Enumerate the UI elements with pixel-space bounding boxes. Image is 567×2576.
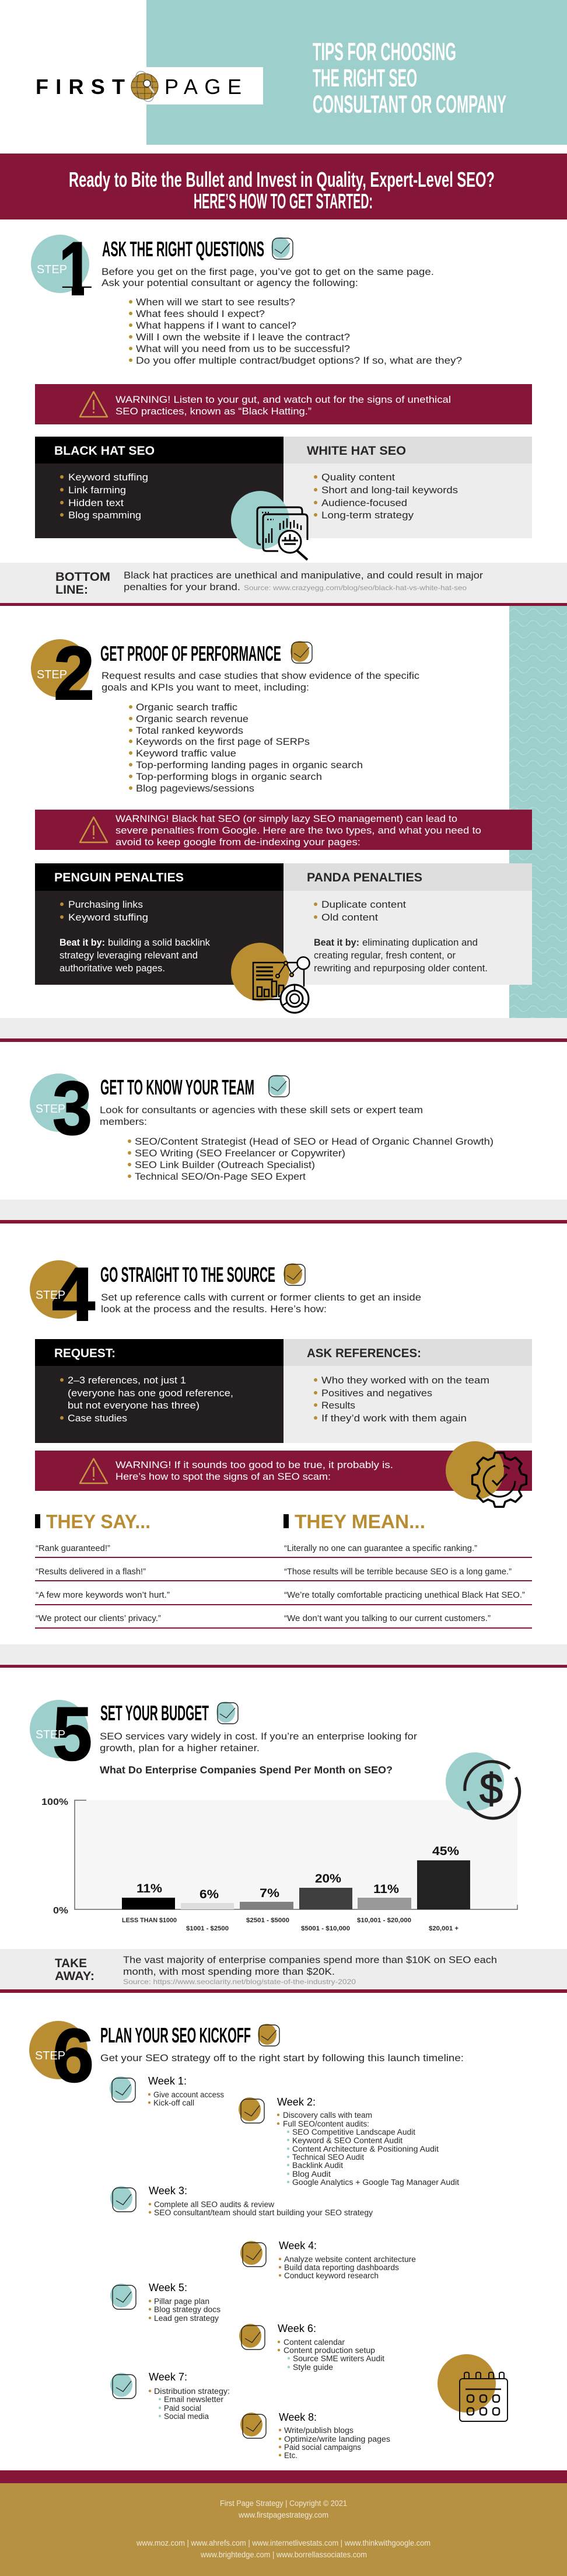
timeline: week 1: Week 1: — [148, 2075, 187, 2087]
panel: bottom line: Source: www.crazyegg.com/blog/seo/black-hat-vs-white-hat-seo — [244, 584, 467, 592]
icon: dollar ring — [446, 1752, 520, 1818]
timeline: week 7: Week 7: — [149, 2371, 187, 2383]
panel: request: (everyone has one good reference, — [68, 1388, 233, 1399]
logo — [36, 67, 263, 104]
team skill list: SEO/Content Strategist (Head of SEO or Head of Organic Channel Growth) — [135, 1136, 494, 1147]
bar chart: $1001 - $2500 — [186, 1925, 229, 1932]
warning callout 1 — [35, 384, 532, 424]
question list — [129, 297, 462, 366]
timeline: week 3: Complete all SEO audits & review — [154, 2200, 274, 2209]
divider band — [0, 1644, 567, 1668]
panel: penguin penalties: PENGUIN PENALTIES — [54, 871, 184, 884]
question list: Will I own the website if I leave the contract? — [136, 332, 350, 343]
timeline: week 2: Technical SEO Audit — [292, 2153, 364, 2162]
translations: “Those results will be terrible because SEO is a long game.” — [284, 1567, 512, 1577]
bar chart: $10,001 - $20,000 — [357, 1917, 411, 1924]
timeline: week 7: Distribution strategy: — [154, 2387, 230, 2396]
icon: checkbox — [268, 1075, 289, 1097]
timeline: week 2: Backlink Audit — [292, 2161, 343, 2170]
panel: white hat seo: Quality content — [321, 472, 395, 483]
timeline: week 3 — [110, 2185, 373, 2217]
warning callout 3: WARNING! If it sounds too good to be true, it probably is. — [116, 1459, 393, 1470]
bar chart: 100% — [41, 1797, 68, 1807]
icon: checkbox — [290, 641, 312, 663]
panel: panda penalties: Beat it by: — [314, 937, 359, 948]
panel: request: but not everyone has three) — [68, 1400, 200, 1411]
panel: white hat seo: Short and long-tail keywords — [321, 484, 458, 496]
warning callout 1: SEO practices, known as “Black Hatting.” — [116, 406, 312, 417]
question list: What will you need from us to be successful? — [136, 343, 350, 354]
icon: analytics windows with magnifier — [231, 491, 307, 560]
panel: black hat seo: Link farming — [68, 484, 126, 496]
timeline: week 8: Paid social campaigns — [284, 2443, 361, 2452]
quotes: “Rank guaranteed!” — [36, 1544, 110, 1553]
bar chart: $2501 - $5000 — [246, 1917, 289, 1924]
timeline: week 2: Blog Audit — [292, 2170, 331, 2178]
step 2 badge: STEP — [37, 668, 67, 681]
step 1 badge: 1 — [59, 226, 93, 311]
step 3 badge — [30, 1065, 92, 1151]
panel: panda penalties: rewriting and repurposing older content. — [314, 963, 488, 974]
timeline: week 6 — [239, 2323, 384, 2372]
translations: “Literally no one can guarantee a specific ranking.” — [284, 1544, 477, 1553]
panel: penguin penalties: building a solid backlink — [108, 937, 210, 948]
translations: “We don’t want you talking to our current customers.” — [284, 1614, 491, 1623]
team skill list: SEO Link Builder (Outreach Specialist) — [135, 1159, 315, 1170]
panel: take away: Source: https://www.seoclarity.net/blog/state-of-the-industry-2020 — [123, 1978, 356, 1986]
kpi list: Organic search traffic — [136, 702, 238, 713]
panel: take away: TAKE — [55, 1957, 87, 1970]
banner: how to get started — [0, 154, 567, 219]
timeline: week 3: Week 3: — [149, 2185, 187, 2197]
timeline: week 2: Full SEO/content audits: — [283, 2120, 369, 2128]
team skill list — [128, 1136, 494, 1182]
panel: black hat seo: Hidden text — [68, 497, 124, 508]
chart title: What Do Enterprise Companies Spend Per Month on SEO? — [100, 1764, 393, 1776]
title — [313, 38, 506, 118]
timeline: week 7 — [110, 2371, 230, 2421]
panel: panda penalties: eliminating duplication and — [362, 937, 478, 948]
timeline: week 4: Conduct keyword research — [284, 2271, 379, 2280]
panel: penguin penalties: Beat it by: — [60, 937, 105, 948]
step 1 badge: STEP — [37, 263, 67, 276]
panel: panda penalties: PANDA PENALTIES — [307, 871, 422, 884]
panel: white hat seo — [284, 437, 532, 538]
panel: penguin penalties — [35, 863, 284, 985]
bar chart: 7% — [260, 1887, 279, 1900]
logo: PAGE — [164, 75, 242, 99]
divider band — [0, 1200, 567, 1223]
step 4 section — [0, 1252, 567, 1668]
bar chart: 45% — [432, 1845, 459, 1858]
panel: panda penalties: Duplicate content — [321, 899, 406, 910]
warning callout 1: WARNING! Listen to your gut, and watch out for the signs of unethical — [116, 394, 451, 405]
timeline: week 2: Discovery calls with team — [283, 2111, 372, 2120]
panel: request: REQUEST: — [54, 1347, 116, 1360]
timeline: week 1: Kick-off call — [153, 2099, 194, 2107]
timeline: week 2: Keyword & SEO Content Audit — [292, 2136, 402, 2145]
bar chart: 0% — [53, 1906, 68, 1916]
icon: checkbox — [216, 1702, 238, 1724]
timeline: week 8: Week 8: — [279, 2411, 317, 2423]
they mean heading: THEY MEAN... — [295, 1511, 425, 1532]
panel: penguin penalties: Purchasing links — [68, 899, 143, 910]
icon: dollar ring: $ — [480, 1766, 503, 1812]
icon: checkbox — [271, 237, 293, 259]
step 3 badge: STEP — [36, 1103, 65, 1116]
icon: calendar — [438, 2354, 508, 2421]
step 2 badge: 2 — [54, 630, 94, 716]
question list: Do you offer multiple contract/budget options? If so, what are they? — [136, 355, 462, 366]
step 2 badge — [31, 630, 94, 716]
step 4 badge: 4 — [52, 1252, 95, 1337]
footer: www.brightedge.com | www.borrellassociates.com — [200, 2550, 367, 2559]
kpi list: Blog pageviews/sessions — [136, 783, 254, 794]
panel: white hat seo: WHITE HAT SEO — [307, 444, 406, 458]
step 2 intro: Request results and case studies that show evidence of the specific — [102, 670, 420, 681]
timeline: week 2: SEO Competitive Landscape Audit — [292, 2128, 415, 2136]
step 1 heading: ASK THE RIGHT QUESTIONS — [102, 237, 264, 261]
step 4 intro — [101, 1292, 421, 1315]
team skill list: Technical SEO/On-Page SEO Expert — [135, 1171, 306, 1182]
panel: take away: month, with most spending more than $20K. — [123, 1966, 335, 1977]
step 5 badge — [30, 1691, 92, 1776]
timeline: week 4: Build data reporting dashboards — [284, 2263, 399, 2272]
decorative teal wave strip — [509, 606, 567, 1018]
warning callout 3 — [35, 1451, 532, 1491]
panel: black hat seo: Keyword stuffing — [68, 472, 148, 483]
title background — [146, 0, 567, 145]
question list: What happens if I want to cancel? — [136, 320, 296, 331]
panel: penguin penalties: Keyword stuffing — [68, 912, 148, 923]
bar chart: 20% — [315, 1872, 341, 1885]
step 2 section — [0, 606, 567, 1042]
footer — [0, 2470, 567, 2576]
they say column — [35, 1511, 170, 1623]
panel: ask references: Positives and negatives — [321, 1388, 432, 1399]
timeline: week 4: Analyze website content architecture — [284, 2255, 416, 2264]
timeline: week 7: Social media — [164, 2412, 209, 2421]
warning callout 3: Here’s how to spot the signs of an SEO scam: — [116, 1471, 331, 1482]
timeline: week 8: Optimize/write landing pages — [284, 2435, 390, 2443]
timeline: week 2: Google Analytics + Google Tag Manager Audit — [292, 2178, 459, 2187]
step 3 heading: GET TO KNOW YOUR TEAM — [100, 1075, 254, 1099]
step 5 badge: STEP — [36, 1728, 65, 1741]
footer: www.firstpagestrategy.com — [238, 2511, 328, 2519]
step 5 intro — [100, 1731, 417, 1754]
step 1 section — [0, 226, 567, 606]
panel: black hat seo — [35, 437, 284, 538]
icon: checkbox — [258, 2024, 279, 2046]
question list: What fees should I expect? — [136, 308, 265, 319]
timeline: week 5: Week 5: — [149, 2282, 187, 2293]
bar chart — [41, 1797, 517, 1932]
kpi list: Keywords on the first page of SERPs — [136, 736, 310, 747]
warning callout 2: severe penalties from Google. Here are the two types, and what you need to — [116, 825, 481, 836]
timeline: week 6: Style guide — [293, 2363, 333, 2372]
step 3 intro: Look for consultants or agencies with these skill sets or expert team — [100, 1104, 423, 1116]
step 6 badge: STEP — [35, 2049, 65, 2062]
step 4 intro: look at the process and the results. Here’s how: — [101, 1303, 327, 1315]
kpi list: Top-performing blogs in organic search — [136, 771, 322, 782]
step 2 heading: GET PROOF OF PERFORMANCE — [100, 642, 281, 665]
timeline: week 2: Week 2: — [277, 2096, 316, 2108]
timeline: week 7: Paid social — [164, 2404, 201, 2413]
warning callout 2: avoid to keep google from de-indexing your pages: — [116, 836, 360, 848]
panel: white hat seo: Long-term strategy — [321, 510, 414, 521]
they say heading: THEY SAY... — [46, 1511, 150, 1532]
footer: First Page Strategy | Copyright © 2021 — [220, 2499, 347, 2508]
step 5 intro: growth, plan for a higher retainer. — [100, 1742, 260, 1754]
panel: bottom line: LINE: — [55, 583, 88, 597]
icon: gear with check — [446, 1441, 526, 1507]
timeline: week 8: Etc. — [284, 2451, 298, 2460]
step 3 badge: 3 — [52, 1065, 92, 1151]
step 3 intro: members: — [100, 1116, 147, 1127]
panel: ask references: ASK REFERENCES: — [307, 1347, 421, 1360]
icon: checkbox — [284, 1263, 305, 1285]
timeline: week 3: SEO consultant/team should start building your SEO strategy — [154, 2208, 373, 2217]
step 4 badge — [30, 1252, 95, 1337]
step 1 badge — [31, 235, 92, 295]
panel: black hat seo: BLACK HAT SEO — [54, 444, 155, 458]
team skill list: SEO Writing (SEO Freelancer or Copywriter) — [135, 1148, 345, 1159]
panel: bottom line: BOTTOM — [55, 570, 110, 584]
step 4 heading: GO STRAIGHT TO THE SOURCE — [100, 1263, 275, 1287]
bar chart: 11% — [373, 1883, 399, 1896]
panel: panda penalties: creating regular, fresh content, or — [314, 950, 456, 961]
panel: bottom line: penalties for your brand. — [124, 581, 240, 592]
timeline: week 5 — [110, 2282, 220, 2323]
panel: request — [35, 1339, 284, 1443]
panel: ask references: Who they worked with on the team — [321, 1375, 489, 1386]
step 2 intro — [102, 670, 420, 693]
icon: report with chart and target — [231, 943, 309, 1013]
timeline: week 1: Give account access — [153, 2090, 224, 2099]
step 6 intro: Get your SEO strategy off to the right start by following this launch timeline: — [100, 2052, 464, 2063]
timeline: week 4: Week 4: — [279, 2240, 317, 2251]
timeline: week 7: Email newsletter — [164, 2395, 224, 2404]
kpi list: Total ranked keywords — [136, 725, 243, 736]
step 6 heading: PLAN YOUR SEO KICKOFF — [100, 2023, 251, 2047]
title: TIPS FOR CHOOSING — [313, 38, 456, 66]
bar chart: 6% — [200, 1888, 219, 1901]
kpi list: Top-performing landing pages in organic search — [136, 759, 363, 771]
step 5 intro: SEO services vary widely in cost. If you’re an enterprise looking for — [100, 1731, 417, 1742]
kpi list: Keyword traffic value — [136, 748, 236, 759]
step 2 intro: goals and KPIs you want to meet, including: — [102, 682, 309, 693]
step 1 intro: Ask your potential consultant or agency the following: — [102, 277, 358, 288]
logo: FIRST — [36, 75, 125, 99]
step 3 section — [0, 1065, 567, 1223]
step 1 intro: Before you get on the first page, you’ve got to get on the same page. — [102, 266, 434, 277]
panel: panda penalties — [284, 863, 532, 985]
timeline: week 2: Content Architecture & Positioning Audit — [292, 2145, 439, 2153]
panel: take away: AWAY: — [55, 1970, 94, 1983]
timeline: week 8 — [240, 2411, 390, 2460]
step 5 section — [0, 1691, 567, 1993]
timeline: week 6: Content calendar — [284, 2338, 345, 2347]
step 5 heading: SET YOUR BUDGET — [100, 1701, 209, 1725]
timeline: week 6: Week 6: — [278, 2323, 316, 2334]
bar chart: 11% — [136, 1882, 162, 1895]
step 6 section — [29, 2013, 508, 2460]
panel: black hat seo: Blog spamming — [68, 510, 141, 521]
warning callout 2 — [35, 810, 532, 850]
step 6 badge: 6 — [52, 2013, 94, 2098]
kpi list — [129, 702, 363, 794]
kpi list: Organic search revenue — [136, 713, 249, 724]
panel: request: Case studies — [68, 1413, 127, 1424]
divider band — [0, 1018, 567, 1042]
panel: ask references — [284, 1339, 532, 1443]
quotes: “We protect our clients’ privacy.” — [36, 1614, 161, 1623]
timeline: week 5: Lead gen strategy — [154, 2314, 219, 2323]
step 3 intro — [100, 1104, 423, 1127]
panel: take away — [0, 1949, 567, 1993]
step 6 badge — [29, 2013, 94, 2098]
they mean column — [284, 1511, 525, 1623]
timeline: week 1 — [110, 2075, 224, 2107]
panel: bottom line — [0, 563, 567, 606]
timeline: week 6: Source SME writers Audit — [293, 2354, 384, 2363]
bar chart: $20,001 + — [429, 1925, 459, 1932]
timeline: week 8: Write/publish blogs — [284, 2426, 354, 2435]
warning callout 2: WARNING! Black hat SEO (or simply lazy SEO management) can lead to — [116, 813, 457, 824]
step 4 badge: STEP — [36, 1289, 65, 1302]
quotes: “Results delivered in a flash!” — [36, 1567, 146, 1577]
quotes: “A few more keywords won’t hurt.” — [36, 1591, 170, 1600]
timeline: week 6: Content production setup — [284, 2346, 375, 2355]
panel: take away: The vast majority of enterprise companies spend more than $10K on SEO each — [123, 1954, 497, 1965]
step 4 intro: Set up reference calls with current or former clients to get an inside — [101, 1292, 421, 1303]
panel: penguin penalties: authoritative web pages. — [60, 963, 165, 974]
translations: “We’re totally comfortable practicing unethical Black Hat SEO.” — [284, 1591, 525, 1600]
question list: When will we start to see results? — [136, 297, 295, 308]
panel: white hat seo: Audience-focused — [321, 497, 407, 508]
panel: penguin penalties: strategy leveraging relevant and — [60, 950, 198, 961]
timeline: week 2 — [239, 2096, 459, 2187]
title: THE RIGHT SEO — [313, 64, 417, 92]
timeline: week 5: Blog strategy docs — [154, 2305, 220, 2314]
panel: bottom line: Black hat practices are unethical and manipulative, and could result in major — [124, 570, 483, 581]
step 1 intro — [102, 266, 434, 288]
timeline: week 4 — [240, 2240, 416, 2280]
banner: how to get started: HERE’S HOW TO GET STARTED: — [194, 189, 373, 213]
bar chart: $5001 - $10,000 — [301, 1925, 350, 1932]
panel: header — [36, 0, 567, 145]
bar chart: LESS THAN $1000 — [122, 1917, 177, 1924]
quotes — [36, 1544, 170, 1623]
panel: panda penalties: Old content — [321, 912, 378, 923]
panel: ask references: If they’d work with them again — [321, 1413, 467, 1424]
panel: ask references: Results — [321, 1400, 355, 1411]
step 5 badge: 5 — [52, 1691, 92, 1776]
translations — [284, 1544, 525, 1623]
footer: www.moz.com | www.ahrefs.com | www.internetlivestats.com | www.thinkwithgoogle.com — [136, 2539, 430, 2547]
panel: request: 2–3 references, not just 1 — [68, 1375, 186, 1386]
timeline: week 5: Pillar page plan — [154, 2297, 209, 2306]
